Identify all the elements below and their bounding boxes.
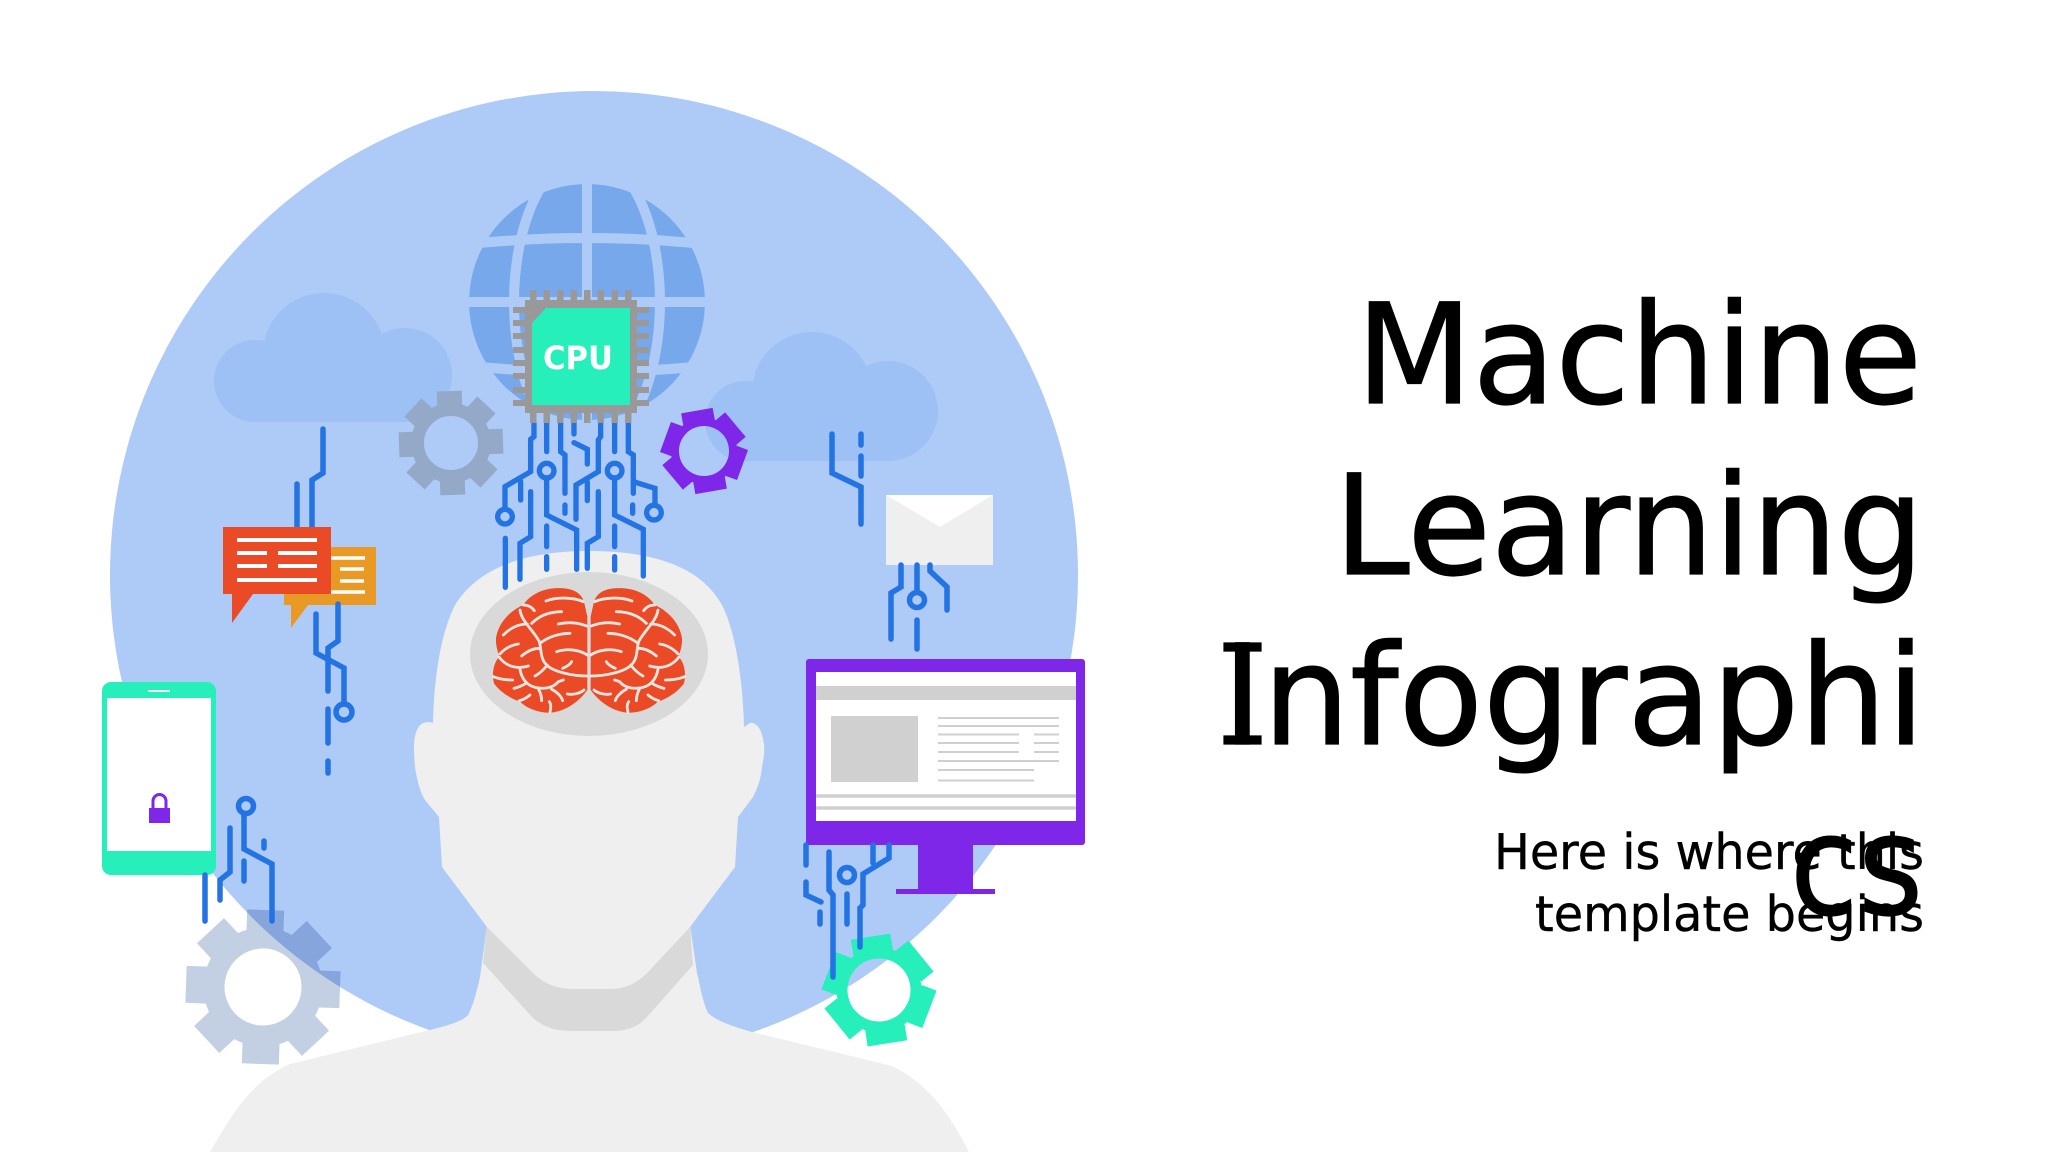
circuit lines from CPU to head bbox=[498, 423, 661, 587]
icon: monitor bbox=[806, 659, 1085, 894]
icon: CPU chip: CPU bbox=[543, 339, 613, 377]
icon: phone with lock bbox=[102, 682, 216, 875]
icon: grey gear bbox=[397, 389, 505, 497]
circuit below chat bubbles bbox=[316, 604, 352, 773]
figure: head bbox=[414, 551, 764, 989]
subtitle: Here is where this bbox=[1494, 824, 1924, 881]
brain left hemisphere bbox=[493, 588, 587, 713]
figure: neck and shoulders bbox=[210, 925, 969, 1152]
brain right hemisphere bbox=[591, 588, 685, 713]
icon: padlock bbox=[149, 794, 170, 823]
icon: CPU chip bbox=[513, 290, 649, 423]
circuit above chat bubbles bbox=[297, 429, 323, 527]
circuit right of globe bbox=[832, 434, 861, 524]
title: Infographi bbox=[1222, 615, 1925, 777]
circuit below monitor bbox=[806, 845, 889, 977]
subtitle: template begins bbox=[1535, 886, 1924, 943]
title bbox=[1222, 274, 1925, 777]
icon: envelope bbox=[886, 495, 993, 565]
icon: left cloud bbox=[214, 293, 452, 422]
icon: brain bbox=[493, 588, 685, 713]
title: Learning bbox=[1334, 445, 1924, 607]
icon: right cloud bbox=[705, 332, 938, 461]
serif bars on capital I bbox=[1224, 643, 1261, 744]
icon: large pale gear bbox=[183, 907, 343, 1067]
subtitle bbox=[1494, 824, 1924, 943]
background circle bbox=[110, 91, 1078, 1059]
icon: purple gear bbox=[654, 403, 754, 499]
circuit between envelope and monitor bbox=[891, 565, 947, 649]
icon: teal gear bbox=[814, 928, 944, 1052]
icon: red chat bubble bbox=[223, 527, 331, 623]
circuit above pale gear bbox=[205, 798, 272, 921]
brain backdrop oval bbox=[470, 572, 708, 736]
title overflow: cs bbox=[1790, 785, 1923, 947]
icon: globe bbox=[469, 184, 705, 420]
icon: orange chat bubble bbox=[284, 547, 376, 628]
title: Machine bbox=[1356, 274, 1922, 436]
